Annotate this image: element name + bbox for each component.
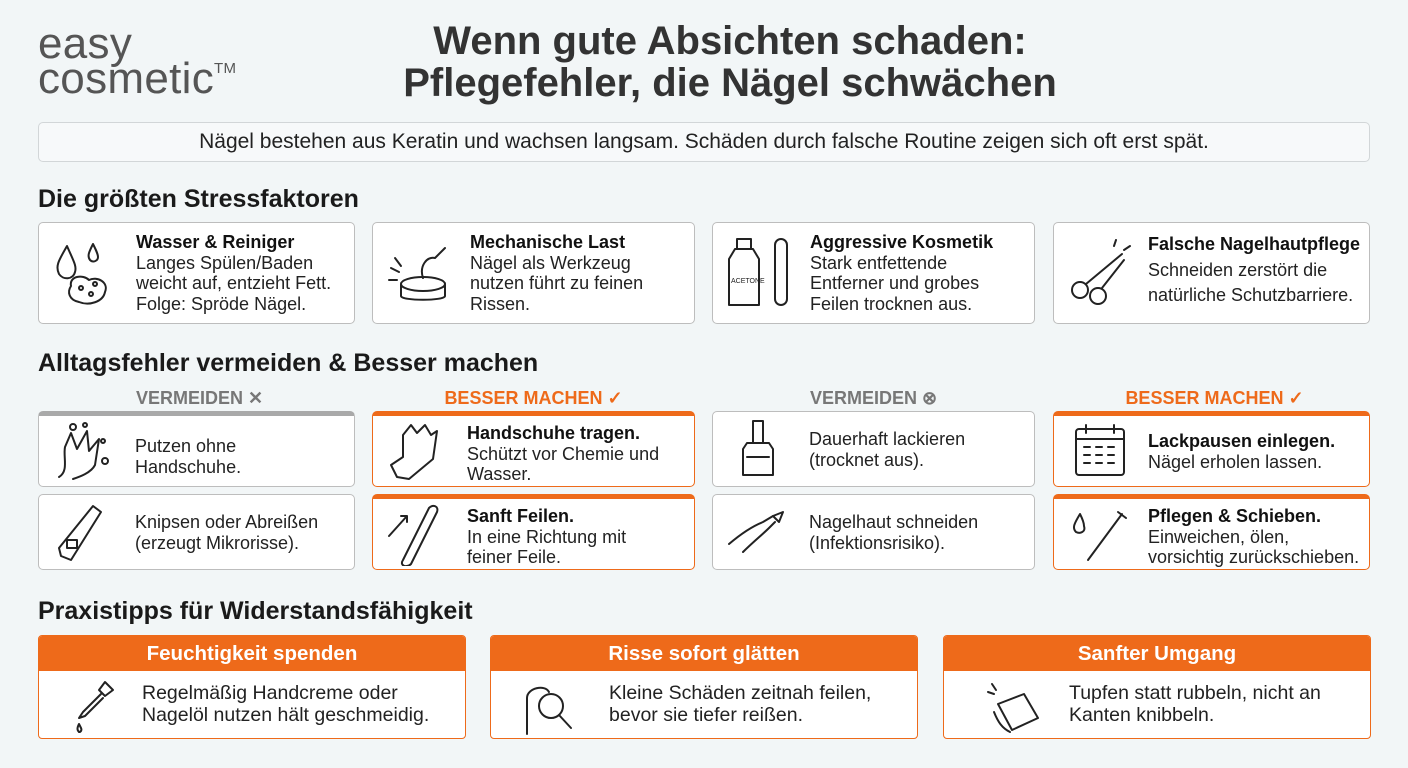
text: Sanft Feilen. — [467, 506, 574, 526]
text — [136, 232, 331, 314]
panel: putzen — [38, 411, 355, 487]
text: Nägel erholen lassen. — [1148, 452, 1322, 472]
tip header: Risse sofort glätten — [608, 642, 800, 665]
logo — [38, 19, 236, 103]
icon: dropper — [76, 681, 114, 733]
panel: lackpausen — [1053, 411, 1370, 487]
text — [467, 423, 659, 484]
logo: easy — [38, 19, 132, 68]
text: (Infektionsrisiko). — [809, 532, 945, 552]
text: Regelmäßig Handcreme oder — [142, 682, 398, 704]
text: (erzeugt Mikrorisse). — [135, 532, 299, 552]
panel: Wasser — [38, 222, 355, 324]
labels: VERMEIDEN ✕ — [136, 388, 263, 408]
panel: Nagelhaut — [1053, 222, 1370, 324]
text: Mechanische Last — [470, 232, 625, 252]
text — [1148, 506, 1359, 567]
icon: glove — [390, 424, 438, 480]
panel: nagelhaut schneiden — [712, 494, 1035, 570]
logo: cosmeticTM — [38, 54, 236, 103]
icon: hand — [58, 422, 109, 480]
text: Aggressive Kosmetik — [810, 232, 993, 252]
title: Pflegefehler, die Nägel schwächen — [403, 61, 1057, 105]
text — [467, 506, 626, 567]
text: Wasser. — [467, 464, 531, 484]
text: Kleine Schäden zeitnah feilen, — [609, 682, 871, 704]
icon: clipper — [58, 505, 102, 561]
subtitle box — [38, 122, 1370, 162]
text: Dauerhaft lackieren — [809, 429, 965, 449]
text: Entferner und grobes — [810, 273, 979, 293]
tip: Risse — [490, 635, 918, 739]
icon: acetone — [728, 238, 788, 306]
text: Feilen trocknen aus. — [810, 294, 972, 314]
text: Rissen. — [470, 294, 530, 314]
panel: knipsen — [38, 494, 355, 570]
text: Wasser & Reiniger — [136, 232, 294, 252]
panel: handschuhe — [372, 411, 695, 487]
text — [135, 436, 241, 476]
text: VERMEIDEN ⊗ — [810, 388, 937, 408]
text: (trocknet aus). — [809, 450, 924, 470]
text: Falsche Nagelhautpflege — [1148, 234, 1360, 254]
panel: feilen — [372, 494, 695, 570]
icon: acetone: ACETONE — [731, 278, 765, 285]
title — [403, 19, 1057, 105]
text: Lackpausen einlegen. — [1148, 431, 1335, 451]
heading: stress: Die größten Stressfaktoren — [38, 185, 359, 213]
text: In eine Richtung mit — [467, 526, 626, 546]
text: Nägel als Werkzeug — [470, 252, 631, 272]
panel: Mechanisch — [372, 222, 695, 324]
text — [809, 512, 978, 553]
text: Handschuhe tragen. — [467, 423, 640, 443]
text — [142, 682, 429, 726]
text — [135, 512, 318, 553]
text: Folge: Spröde Nägel. — [136, 294, 306, 314]
text: Tupfen statt rubbeln, nicht an — [1069, 682, 1321, 704]
subtitle box: Nägel bestehen aus Keratin und wachsen langsam. Schäden durch falsche Routine zeigen sich oft erst spät. — [199, 130, 1209, 153]
icon: polish — [742, 420, 774, 476]
text: Stark entfettende — [810, 252, 947, 272]
tip header — [39, 636, 465, 671]
icon: can — [388, 247, 446, 301]
text: BESSER MACHEN ✓ — [1125, 388, 1304, 408]
text: Schützt vor Chemie und — [467, 444, 659, 464]
text: Handschuhe. — [135, 456, 241, 476]
text: Nagelhaut schneiden — [809, 512, 978, 532]
heading: praxis: Praxistipps für Widerstandsfähigkeit — [38, 597, 473, 625]
text: weicht auf, entzieht Fett. — [136, 273, 331, 293]
title: Wenn gute Absichten schaden: — [433, 19, 1027, 63]
icon: file — [388, 504, 438, 566]
text: Knipsen oder Abreißen — [135, 512, 318, 532]
text: Kanten knibbeln. — [1069, 704, 1214, 726]
text: vorsichtig zurückschieben. — [1148, 547, 1359, 567]
text: Schneiden zerstört die — [1148, 260, 1327, 280]
text: Langes Spülen/Baden — [136, 252, 313, 272]
text — [609, 682, 871, 726]
text: Nagelöl nutzen hält geschmeidig. — [142, 704, 429, 726]
tip header — [944, 636, 1370, 671]
tip: Feuchtigkeit — [38, 635, 466, 739]
panel: pflegen — [1053, 494, 1370, 570]
tip: Umgang — [943, 635, 1371, 739]
text — [810, 232, 994, 314]
text: BESSER MACHEN ✓ — [444, 388, 623, 408]
icon: scissors — [1071, 239, 1131, 305]
text — [1069, 682, 1321, 726]
icon: magnifier — [526, 686, 572, 735]
tip header — [491, 636, 917, 671]
text — [470, 232, 643, 314]
text: nutzen führt zu feinen — [470, 273, 643, 293]
text — [1148, 234, 1360, 304]
icon: cloth hand — [987, 683, 1039, 733]
text — [1148, 431, 1335, 472]
tip header: Feuchtigkeit spenden — [147, 642, 357, 665]
heading: alltag: Alltagsfehler vermeiden & Besser machen — [38, 349, 538, 377]
icon: drop & pusher — [1073, 511, 1127, 561]
text — [809, 429, 965, 470]
text: natürliche Schutzbarriere. — [1148, 284, 1353, 304]
text: Einweichen, ölen, — [1148, 526, 1289, 546]
icon: nipper — [728, 511, 784, 553]
icon: calendar — [1075, 424, 1125, 476]
text: Pflegen & Schieben. — [1148, 506, 1321, 526]
text: feiner Feile. — [467, 547, 561, 567]
text: Putzen ohne — [135, 436, 236, 456]
icon: water — [56, 243, 107, 305]
panel: Kosmetik — [712, 222, 1035, 324]
text: bevor sie tiefer reißen. — [609, 704, 803, 726]
panel: lackieren — [712, 411, 1035, 487]
tip header: Sanfter Umgang — [1078, 642, 1236, 665]
